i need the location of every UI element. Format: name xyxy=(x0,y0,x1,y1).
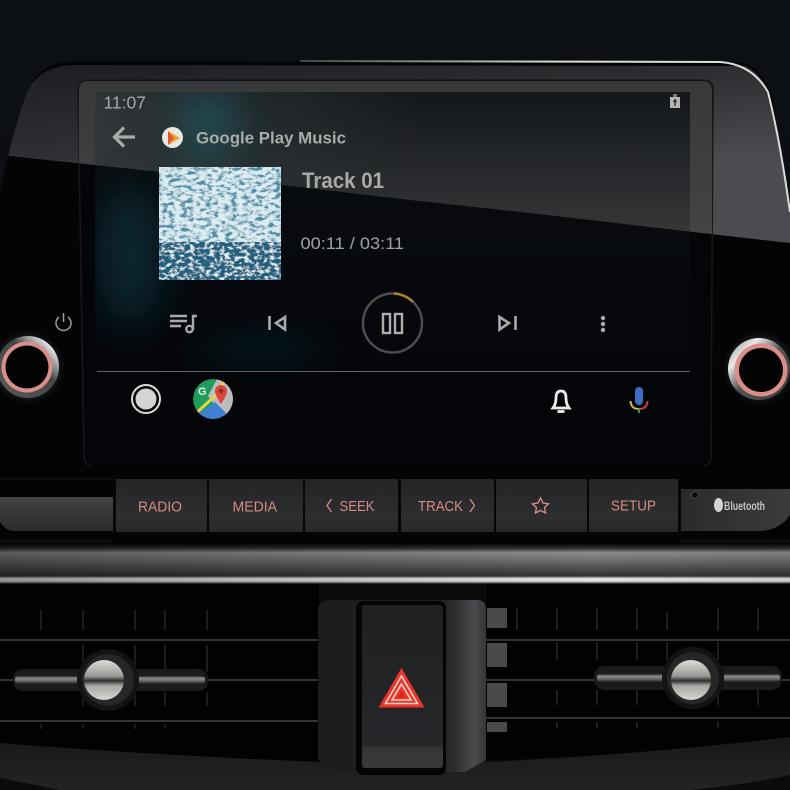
icon: back arrow xyxy=(114,128,135,146)
status bar: clock: 11:07 xyxy=(104,92,146,112)
heading: track title: Track 01 xyxy=(302,168,384,193)
icon: bell xyxy=(553,391,569,412)
panel: lower console xyxy=(0,466,790,556)
icon: maps xyxy=(193,379,233,419)
panel: hazard switch housing xyxy=(318,584,486,775)
icon: next xyxy=(500,316,516,330)
icon: previous xyxy=(270,316,285,330)
button: favourite xyxy=(496,479,587,532)
right tuning knob xyxy=(727,335,790,401)
panel: now playing screen xyxy=(95,90,690,372)
icon: queue xyxy=(170,316,197,332)
button: setup: SETUP xyxy=(611,498,656,514)
button: media xyxy=(209,479,303,532)
lower dash xyxy=(0,737,790,790)
icon: home xyxy=(132,385,160,413)
button: track: TRACK xyxy=(418,498,463,515)
left volume knob xyxy=(0,334,61,400)
button: setup xyxy=(589,479,678,532)
icon: pause with progress ring xyxy=(363,294,422,352)
text: elapsed time: 00:11 / 03:11 xyxy=(300,235,404,253)
icon: power xyxy=(56,313,71,331)
button: media: MEDIA xyxy=(232,498,277,516)
right trim with Bluetooth label xyxy=(681,489,790,531)
album artwork xyxy=(159,167,281,280)
icon: maps: G xyxy=(198,386,207,398)
icon: microphone xyxy=(630,387,648,413)
hazard button xyxy=(356,601,446,775)
vent slider xyxy=(594,647,782,709)
panel: display glass xyxy=(78,80,713,467)
divider xyxy=(97,371,690,372)
panel: hardware buttons xyxy=(113,475,681,535)
button: seek: SEEK xyxy=(340,498,374,515)
button: track xyxy=(401,479,494,532)
right trim with Bluetooth label: Bluetooth xyxy=(724,499,765,513)
icon: battery xyxy=(670,94,680,108)
chrome trim bar xyxy=(0,544,790,584)
icon: more xyxy=(601,316,605,332)
left trim strip xyxy=(0,497,114,531)
panel: screen bezel xyxy=(0,60,790,480)
panel: right air vent xyxy=(486,584,790,760)
button: seek xyxy=(305,479,398,532)
icon: Google Play Music xyxy=(162,127,183,148)
panel: left air vent xyxy=(0,584,320,762)
vent slider xyxy=(13,649,208,711)
button: radio xyxy=(116,479,207,532)
icon: hazard triangle xyxy=(378,668,424,708)
heading: app name: Google Play Music xyxy=(196,130,346,148)
button: radio: RADIO xyxy=(138,498,182,516)
